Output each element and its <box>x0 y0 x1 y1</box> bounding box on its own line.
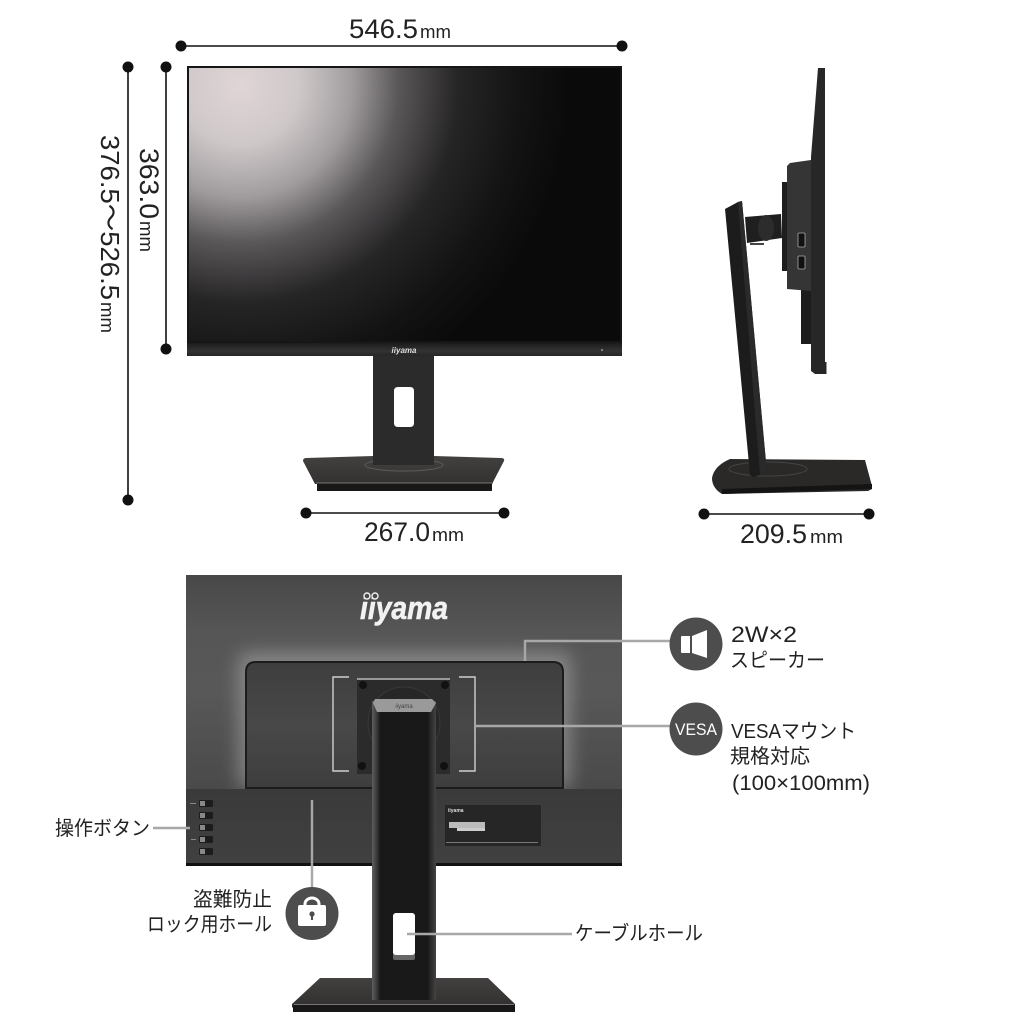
callout: VESA mount <box>476 702 870 795</box>
callout: security lock hole: 盗難防止 <box>193 888 272 911</box>
callout: speaker <box>525 618 825 672</box>
dimension: side depth 209.5mm <box>698 508 874 549</box>
rear stand column with cable hole <box>372 699 436 1000</box>
side housing with USB ports <box>787 160 811 291</box>
rear logo: iiyama <box>360 590 448 626</box>
dimension: overall width 546.5mm: 546.5 <box>349 14 418 44</box>
dimension: panel height 363.0mm: mm <box>136 221 156 252</box>
side panel <box>811 68 826 374</box>
callout: speaker: スピーカー <box>730 650 825 672</box>
rear rating label <box>445 805 541 846</box>
dimension: front base width 267.0mm <box>300 508 510 547</box>
dimension: total height 376.5-526.5mm <box>95 62 134 506</box>
front stand base <box>303 456 504 491</box>
side view monitor <box>712 68 872 494</box>
rear rating label: iiyama <box>448 808 464 814</box>
dimension: front base width 267.0mm: 267.0 <box>364 517 430 547</box>
rear view monitor <box>186 575 622 866</box>
front bezel with logo: iiyama <box>392 346 417 355</box>
hump glow <box>238 652 571 789</box>
callout: operation buttons: 操作ボタン <box>55 817 150 840</box>
dimension: side depth 209.5mm: mm <box>810 527 843 547</box>
side base <box>712 459 872 494</box>
dimension: total height 376.5-526.5mm: 376.5～526.5 <box>95 135 125 300</box>
rear housing hump <box>246 662 563 788</box>
icon: padlock <box>298 898 326 926</box>
front view monitor <box>187 66 622 491</box>
front bezel with logo <box>187 343 622 356</box>
dimension: panel height 363.0mm <box>134 62 172 354</box>
dimension: overall width 546.5mm <box>176 14 628 52</box>
side back plate and lower housing <box>782 182 811 344</box>
callout: speaker: 2W×2 <box>731 622 797 647</box>
dimension: total height 376.5-526.5mm: mm <box>97 302 117 333</box>
callout: VESA mount: 規格対応 <box>730 745 810 768</box>
rear panel <box>186 575 622 865</box>
dimension: overall width 546.5mm: mm <box>420 22 451 42</box>
callout: security lock hole <box>147 800 338 940</box>
rear operation buttons <box>190 800 213 855</box>
rear stand base <box>292 978 515 1012</box>
side arm <box>745 214 782 245</box>
front stand neck with cable hole <box>373 356 434 465</box>
dimension: side depth 209.5mm: 209.5 <box>740 519 807 549</box>
VESA plate with screws <box>357 678 450 774</box>
icon: speaker <box>681 630 707 658</box>
callout: security lock hole: ロック用ホール <box>147 913 272 936</box>
callout: cable hole: ケーブルホール <box>575 921 703 945</box>
dimension: front base width 267.0mm: mm <box>432 525 464 545</box>
VESA brackets <box>333 677 475 771</box>
rear stand column with cable hole: iiyama <box>395 704 413 710</box>
callout: VESA mount: (100×100mm) <box>732 772 870 795</box>
side stand column <box>725 201 767 477</box>
front screen <box>187 66 622 356</box>
dimension: panel height 363.0mm: 363.0 <box>134 148 164 219</box>
callout: VESA mount: VESAマウント <box>731 721 856 743</box>
callout: VESA mount: VESA <box>675 720 718 739</box>
